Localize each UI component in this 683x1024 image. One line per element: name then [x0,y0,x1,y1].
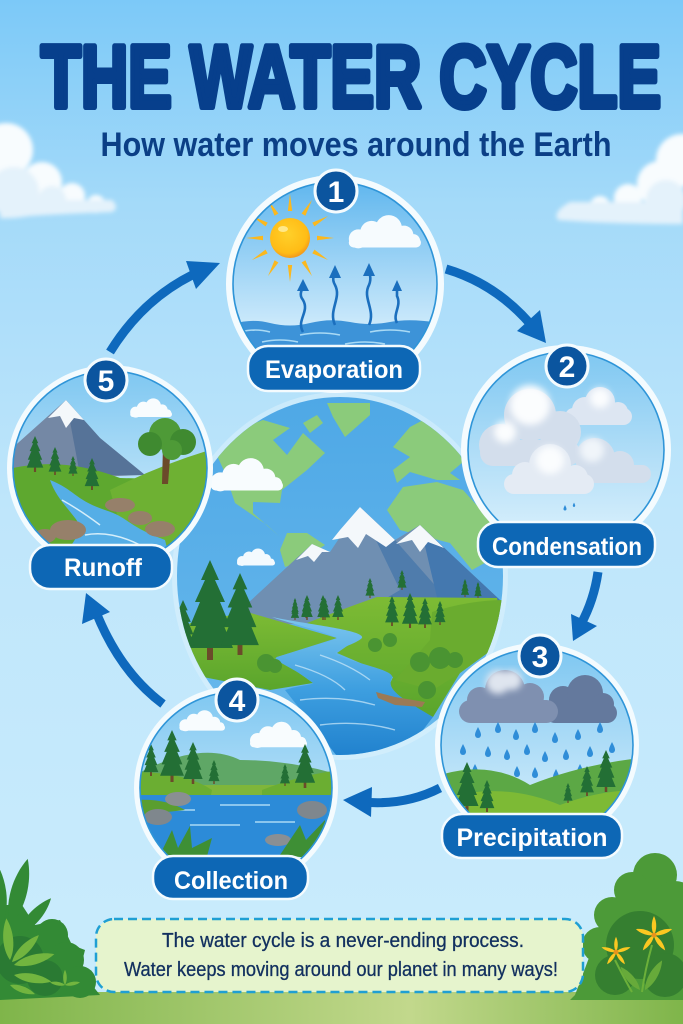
arrow: runoff to evaporation [110,261,220,352]
number badge 3: 3 [532,641,548,674]
label pill [478,522,655,567]
panel: step 3 precipitation [435,635,640,858]
ring [134,686,338,890]
scene: lake with trees [140,695,332,858]
number badge 4: 4 [229,685,246,718]
label pill [442,814,622,858]
arrow: condensation to precipitation [571,572,598,641]
icon: yellow flowers [601,916,673,992]
panel: step 5 runoff [5,359,215,589]
icon: vapour arrows [301,272,398,332]
panel: step 1 evaporation [226,170,444,400]
number badge 1: 1 [328,176,344,209]
scene: mountain stream [14,373,206,548]
ring [461,345,671,555]
label text: Condensation [492,533,642,561]
label text: Precipitation [456,824,608,852]
icon: sun [246,194,334,282]
number badge 5: 5 [98,365,114,398]
scene: clouds [468,354,664,521]
globe halo [172,392,508,760]
bush: bottom left [0,857,100,1000]
label text: Runoff [64,554,143,582]
number badge 1 [315,170,357,212]
icon: cloud [349,215,421,248]
scene: rain clouds and hills [442,652,632,813]
subtitle: How water moves around the Earth [100,126,612,164]
panel: step 2 condensation [460,345,672,567]
label pill [153,856,308,899]
callout line 2: Water keeps moving around our planet in many ways! [124,959,558,981]
cloud: top right [556,134,683,224]
central earth globe with landscape [170,390,510,760]
arrow: precipitation to collection [343,787,440,817]
number badge 3 [519,635,561,677]
globe scene [170,390,510,760]
panel: step 4 collection [134,679,340,899]
water [241,320,429,349]
scene: sun, cloud, rising vapour over water [234,185,436,349]
label pill [30,545,172,589]
callout box [96,919,583,992]
arrow: evaporation to condensation [446,269,546,343]
grass ground [0,992,683,1024]
label pill [248,346,420,391]
number badge 2 [546,345,588,387]
label text: Evaporation [265,356,403,384]
callout line 1: The water cycle is a never-ending process. [162,930,524,952]
ring [435,643,639,847]
callout: closing message [96,919,583,992]
number badge 2: 2 [559,351,575,384]
number badge 4 [216,679,258,721]
label text: Collection [174,867,288,895]
arrow: collection to runoff [82,593,163,704]
ring [7,365,213,571]
number badge 5 [85,359,127,401]
bush: bottom right [570,853,683,1000]
cloud: top left [0,123,116,218]
ring [226,175,444,393]
